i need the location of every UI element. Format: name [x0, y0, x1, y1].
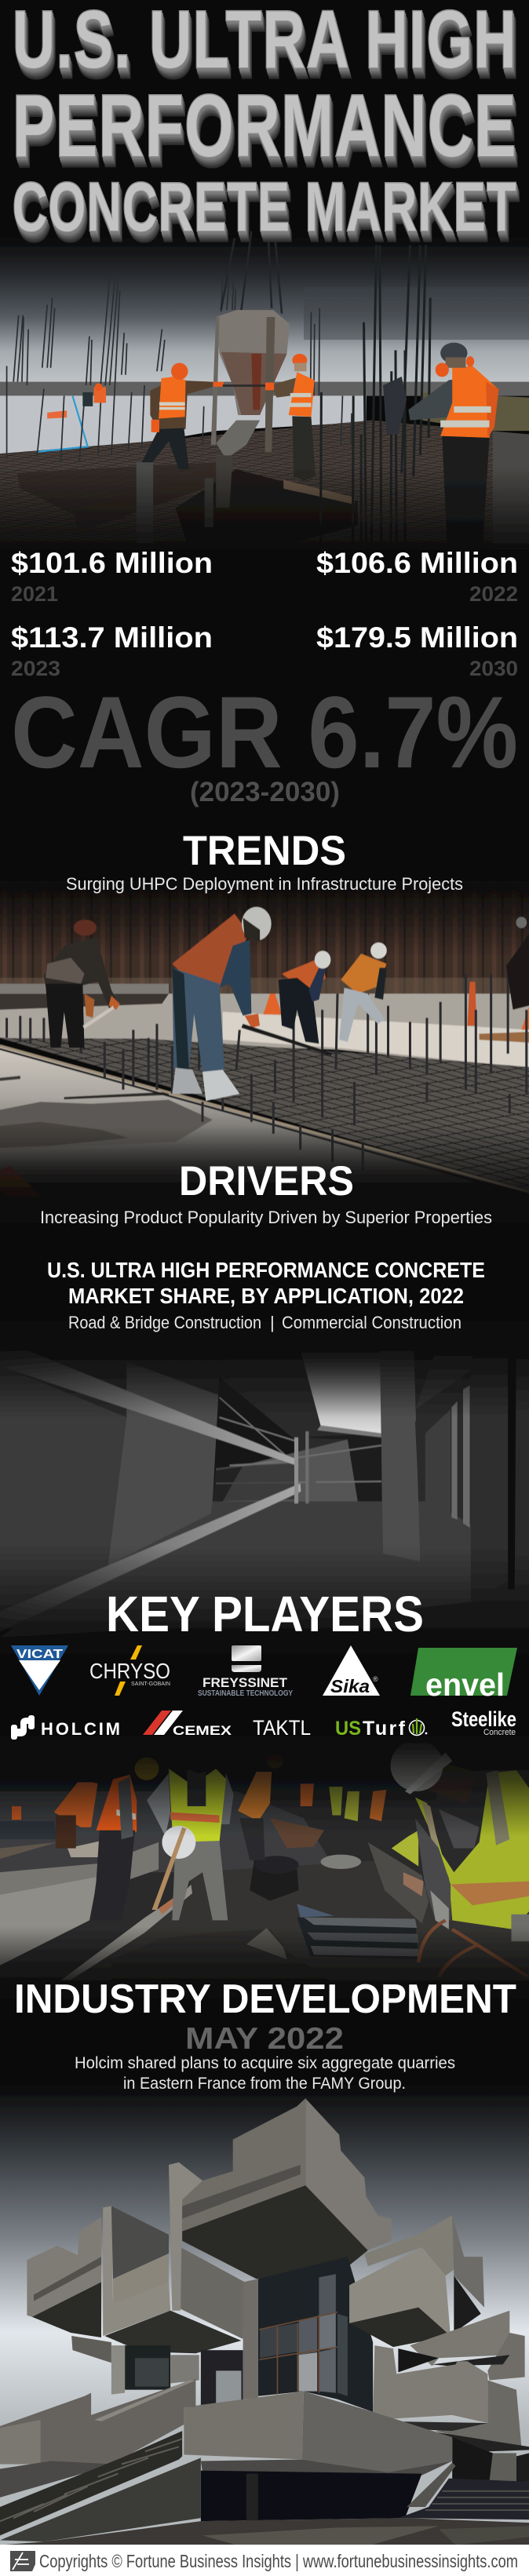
industry development heading: INDUSTRY DEVELOPMENT — [14, 1977, 516, 2022]
logo: Sika: Sika — [330, 1676, 370, 1696]
logo: Steelike — [451, 1707, 516, 1737]
logo: Chryso: CHRYSO — [89, 1659, 170, 1683]
logo: Vicat: VICAT — [16, 1648, 63, 1661]
stat 2022 — [316, 547, 518, 606]
logo: US Turf: Turf — [363, 1718, 406, 1740]
logo: Cemex: CEMEX — [173, 1723, 232, 1738]
development description — [75, 2054, 455, 2093]
key player logos — [11, 1645, 517, 1740]
photo: concrete interior structure — [0, 1321, 529, 1653]
share heading line 1: U.S. ULTRA HIGH PERFORMANCE CONCRETE — [47, 1258, 485, 1282]
logo: Steelike: Concrete — [483, 1728, 516, 1737]
footer bar — [0, 2545, 529, 2576]
logo: Vicat — [11, 1645, 68, 1696]
logo: Chryso — [89, 1645, 170, 1696]
logo: Cemex — [143, 1711, 232, 1738]
stat 2021: $101.6 Million — [11, 547, 213, 579]
trends heading: TRENDS — [183, 828, 346, 874]
stat 2021 — [11, 547, 213, 606]
photo: road crew pouring concrete — [0, 1737, 529, 1998]
logo: Envel — [410, 1648, 517, 1703]
stat 2023 — [11, 621, 213, 680]
logo: Taktl: TAKTL — [253, 1716, 311, 1740]
description line 1: Holcim shared plans to acquire six aggregate quarries — [75, 2054, 455, 2072]
footer brand icon — [10, 2551, 35, 2571]
stat 2022: 2022 — [469, 582, 518, 606]
logo: Freyssinet — [198, 1645, 293, 1698]
market size statistics — [11, 547, 518, 680]
trends subtitle: Surging UHPC Deployment in Infrastructure Projects — [66, 874, 463, 894]
logo: US Turf — [335, 1718, 427, 1740]
title — [13, 0, 517, 246]
stat 2021: 2021 — [11, 582, 58, 606]
stat 2030: $179.5 Million — [316, 621, 518, 654]
logo: Sika: ® — [373, 1675, 378, 1683]
logo: Sika — [323, 1645, 380, 1696]
logo: Holcim — [11, 1715, 120, 1740]
application segments — [68, 1313, 462, 1332]
description line 2: in Eastern France from the FAMY Group. — [123, 2075, 406, 2093]
section heading: market share by application — [47, 1258, 485, 1308]
logo: Chryso: SAINT-GOBAIN — [131, 1682, 170, 1687]
stat 2023: $113.7 Million — [11, 621, 213, 654]
segment: road and bridge: Road & Bridge Construction — [68, 1313, 261, 1332]
logo: Holcim: HOLCIM — [41, 1719, 120, 1739]
stat 2022: $106.6 Million — [316, 547, 518, 579]
stat 2030: 2030 — [469, 657, 518, 680]
share heading line 2: MARKET SHARE, BY APPLICATION, 2022 — [68, 1284, 464, 1308]
key players heading: KEY PLAYERS — [106, 1586, 424, 1642]
logo: Freyssinet: FREYSSINET — [202, 1675, 288, 1690]
photo: brutalist concrete building — [0, 2086, 529, 2545]
stat 2023: 2023 — [11, 657, 60, 680]
logo: Envel: envel — [425, 1667, 505, 1703]
logo: Freyssinet: SUSTAINABLE TECHNOLOGY — [198, 1689, 293, 1698]
CAGR period: (2023-2030) — [190, 777, 340, 807]
development date: MAY 2022 — [185, 2022, 344, 2056]
logo: US Turf: US — [335, 1718, 361, 1740]
segment divider: | — [270, 1313, 275, 1332]
photo: workers pouring concrete from a hopper — [0, 231, 529, 549]
drivers subtitle: Increasing Product Popularity Driven by Superior Properties — [40, 1208, 492, 1227]
segment: commercial: Commercial Construction — [282, 1313, 462, 1332]
photo: workers on rebar mesh — [0, 882, 529, 1222]
stat 2030 — [316, 621, 518, 680]
drivers heading: DRIVERS — [179, 1158, 354, 1204]
